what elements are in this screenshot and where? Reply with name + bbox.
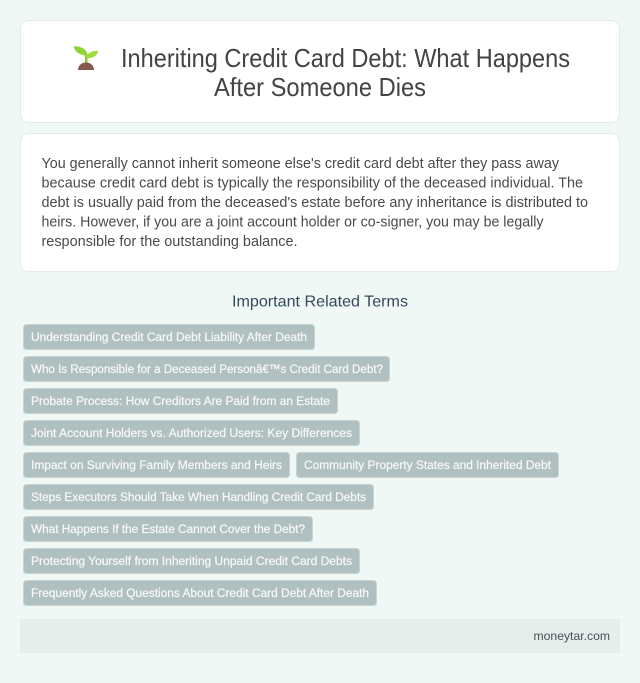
- heading: title: [121, 43, 570, 102]
- footer bar: [20, 619, 620, 653]
- text block: summary: [42, 156, 588, 250]
- heading: important related terms: Important Related Terms: [232, 294, 408, 310]
- text block: summary: because credit card debt is typically the responsibility of the deceased individual. The: [42, 176, 583, 192]
- tag: Steps Executors Should Take When Handling Credit Card Debts: [31, 490, 366, 504]
- tag: [296, 452, 558, 478]
- panel: related term tags: [24, 324, 558, 606]
- text block: summary: responsible for the outstanding balance.: [42, 234, 298, 250]
- tag: [24, 484, 374, 510]
- heading: title: After Someone Dies: [214, 72, 426, 102]
- tag: [24, 516, 312, 542]
- footer source text: moneytar.com: [534, 629, 610, 643]
- text block: summary: heirs. However, if you are a joint account holder or co-signer, you may be legally: [42, 214, 544, 230]
- tag: [24, 420, 360, 446]
- panel: title card: [20, 20, 620, 122]
- tag: Probate Process: How Creditors Are Paid from an Estate: [31, 394, 330, 408]
- tag: [24, 356, 390, 382]
- tag: [24, 548, 360, 574]
- tag: Impact on Surviving Family Members and Heirs: [31, 458, 282, 472]
- tag: [24, 324, 314, 350]
- tag: [24, 388, 338, 414]
- tag: Joint Account Holders vs. Authorized Users: Key Differences: [31, 426, 352, 440]
- tag: [24, 452, 290, 478]
- heading: title: Inheriting Credit Card Debt: What Happens: [121, 43, 570, 73]
- tag: Understanding Credit Card Debt Liability After Death: [31, 330, 307, 344]
- panel: summary card: [20, 134, 620, 272]
- icon: sprout: [74, 46, 98, 70]
- tag: Frequently Asked Questions About Credit Card Debt After Death: [31, 586, 369, 600]
- text block: summary: debt is usually paid from the deceased's estate before any inheritance is distributed to: [42, 195, 588, 211]
- tag: Protecting Yourself from Inheriting Unpaid Credit Card Debts: [31, 554, 352, 568]
- text block: summary: You generally cannot inherit someone else's credit card debt after they pass away: [42, 156, 560, 172]
- tag: [24, 580, 376, 606]
- tag: Community Property States and Inherited Debt: [304, 458, 552, 472]
- tag: Who Is Responsible for a Deceased Personâ€™s Credit Card Debt?: [31, 362, 383, 376]
- tag: What Happens If the Estate Cannot Cover the Debt?: [31, 522, 305, 536]
